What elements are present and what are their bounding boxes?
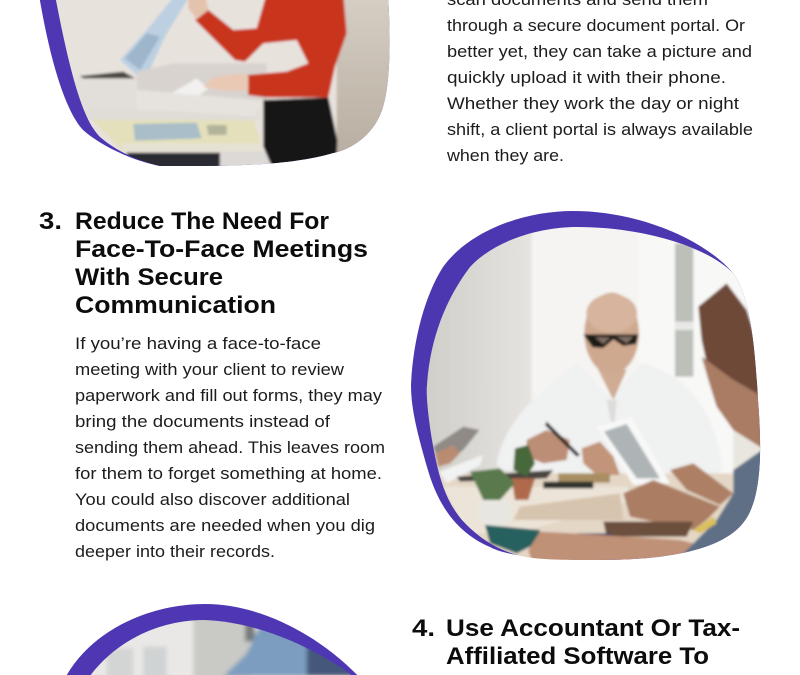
text block: step 3 description: documents are needed when you dig <box>75 517 375 535</box>
text block: step 3 description: You could also discover additional <box>75 491 350 509</box>
heading: step 3: 3. <box>39 208 62 235</box>
text block: step 2 description continued: when they are. <box>446 147 564 165</box>
heading: step 4: Affiliated Software To <box>446 643 709 670</box>
text block: step 3 description <box>75 335 385 561</box>
photo: man in a meeting with tablets <box>411 211 773 567</box>
heading: step 3: With Secure <box>75 264 223 291</box>
photo: person in denim jacket <box>60 604 367 675</box>
heading: step 3: Communication <box>75 292 276 319</box>
text block: step 3 description: meeting with your client to review <box>75 361 344 379</box>
text block: step 3 description: deeper into their records. <box>75 543 275 561</box>
heading: step 4 <box>412 615 740 670</box>
heading: step 4: Use Accountant Or Tax- <box>446 615 740 642</box>
photo: woman at copier <box>39 0 400 173</box>
text block: step 3 description: for them to forget something at home. <box>75 465 382 483</box>
text block: step 2 description continued: Whether they work the day or night <box>447 95 739 113</box>
text block: step 2 description continued: quickly upload it with their phone. <box>447 69 726 87</box>
text block: step 3 description: sending them ahead. This leaves room <box>75 439 385 457</box>
heading: step 3 <box>39 208 368 319</box>
text block: step 3 description: If you’re having a face-to-face <box>75 335 321 353</box>
text block: step 2 description continued: shift, a client portal is always available <box>447 121 753 139</box>
text block: step 2 description continued: through a secure document portal. Or <box>447 17 746 35</box>
text block: step 2 description continued <box>446 0 753 165</box>
text block: step 3 description: bring the documents instead of <box>75 413 330 431</box>
heading: step 3: Face-To-Face Meetings <box>75 236 368 263</box>
text block: step 2 description continued: better yet, they can take a picture and <box>447 43 752 61</box>
heading: step 3: Reduce The Need For <box>75 208 329 235</box>
heading: step 4: 4. <box>412 615 435 642</box>
text block: step 3 description: paperwork and fill out forms, they may <box>75 387 383 405</box>
